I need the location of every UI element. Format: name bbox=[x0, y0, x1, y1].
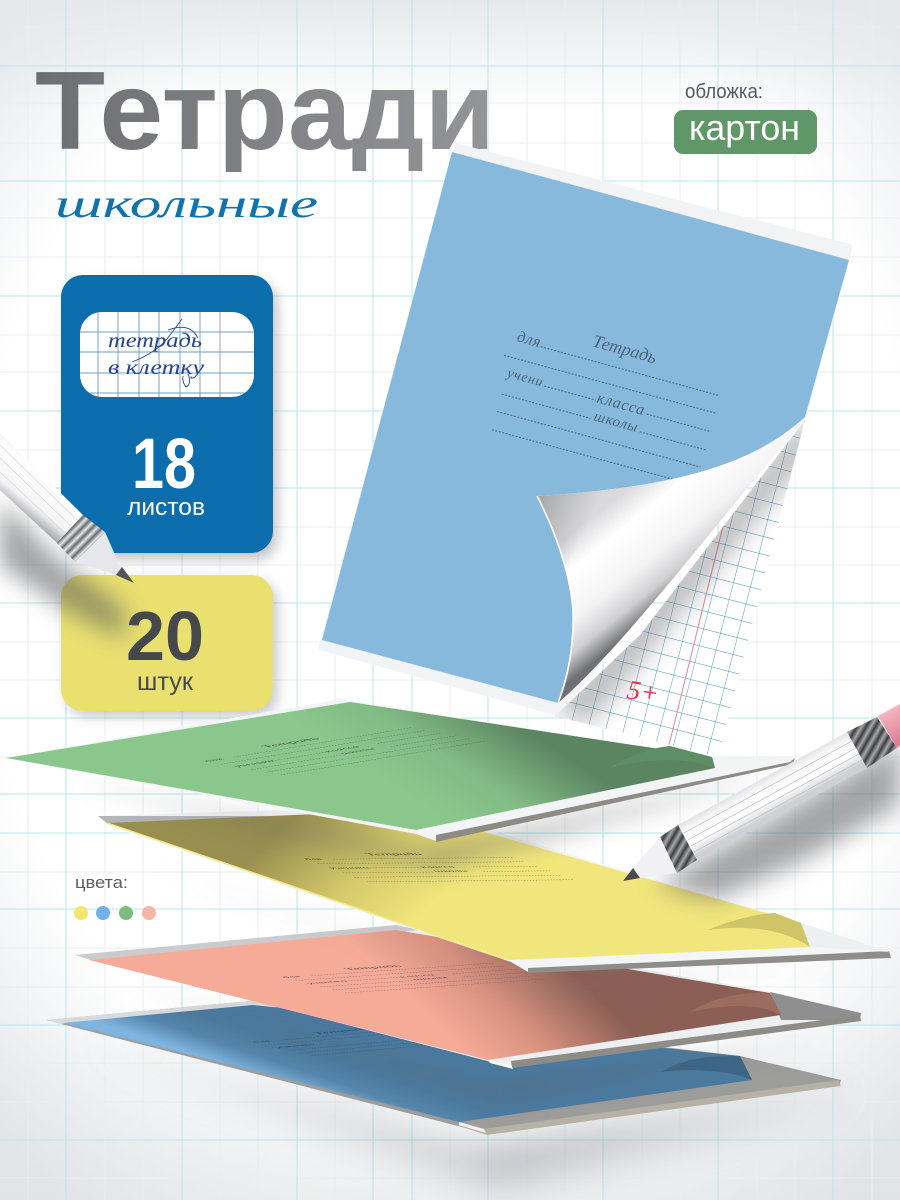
cover text: школы bbox=[592, 409, 640, 436]
cover text: для bbox=[301, 858, 326, 861]
cover text: класса bbox=[417, 865, 459, 869]
number 20: 20 bbox=[126, 597, 204, 675]
cover text: школы bbox=[336, 748, 379, 755]
title: Тетради bbox=[35, 49, 495, 173]
cover text: ученика bbox=[271, 1043, 319, 1049]
subtitle handwriting: школьные bbox=[55, 181, 318, 226]
legend caption: цвета: bbox=[75, 873, 128, 892]
ruled label: тетрадь в клетку: тетрадь bbox=[108, 330, 202, 352]
ruled label: тетрадь в клетку: в клетку bbox=[108, 357, 204, 379]
cover text bbox=[484, 309, 729, 486]
cover text: школы bbox=[430, 869, 471, 873]
notebook: dark blue, bottom of stack bbox=[46, 1000, 860, 1185]
caption штук: штук bbox=[137, 668, 194, 696]
cover text: ученика bbox=[324, 866, 373, 870]
cover text: учени bbox=[504, 366, 545, 390]
curled corner bbox=[537, 417, 805, 703]
cover text bbox=[184, 724, 486, 775]
caption листов: листов bbox=[127, 494, 205, 521]
number 18: 18 bbox=[132, 425, 196, 504]
ruled label: тетрадь в клетку bbox=[80, 312, 254, 397]
cover text: для bbox=[515, 328, 543, 351]
swatch: green bbox=[119, 906, 133, 920]
cover text: для bbox=[249, 1040, 274, 1044]
cover text: класса bbox=[320, 745, 364, 753]
pencil right bbox=[623, 704, 900, 900]
cover label caption: обложка: bbox=[685, 81, 763, 103]
card: pack quantity bbox=[61, 575, 278, 717]
cover text: Тетрадь bbox=[257, 737, 323, 748]
cover bbox=[322, 152, 849, 703]
cover text: Тетрадь bbox=[361, 852, 426, 856]
cover text: Тетрадь bbox=[591, 331, 659, 367]
cover text: для bbox=[200, 758, 227, 762]
pencil left bbox=[0, 433, 134, 640]
cover text: школы bbox=[409, 976, 451, 981]
notebook: green bbox=[6, 699, 795, 870]
cover text: Тетрадь bbox=[340, 964, 405, 971]
cover text bbox=[287, 851, 574, 882]
cover text: класса bbox=[396, 974, 438, 978]
main notebook: blue cover with curled corner bbox=[318, 143, 852, 757]
card: sheets count bbox=[61, 275, 278, 560]
swatch: pink bbox=[142, 906, 156, 920]
cover material pill: картон bbox=[689, 107, 800, 148]
swatch: blue bbox=[96, 906, 110, 920]
inner squared page bbox=[552, 415, 815, 757]
cover text bbox=[236, 1020, 517, 1056]
cover text: для bbox=[279, 975, 304, 979]
grade 5+: 5+ bbox=[625, 674, 661, 708]
cover text: Тетрадь bbox=[309, 1027, 374, 1035]
cover text bbox=[265, 959, 555, 993]
colours legend bbox=[74, 873, 156, 920]
cover material pill bbox=[674, 107, 817, 154]
swatch: yellow bbox=[74, 906, 88, 920]
cover text: ученика bbox=[229, 759, 280, 768]
back sheet bbox=[318, 143, 852, 716]
cover text: класса bbox=[595, 390, 647, 419]
cover text: ученика bbox=[302, 980, 351, 985]
notebook: pink bbox=[75, 925, 861, 1100]
cover material label bbox=[674, 81, 817, 154]
notebook: yellow bbox=[98, 806, 891, 990]
